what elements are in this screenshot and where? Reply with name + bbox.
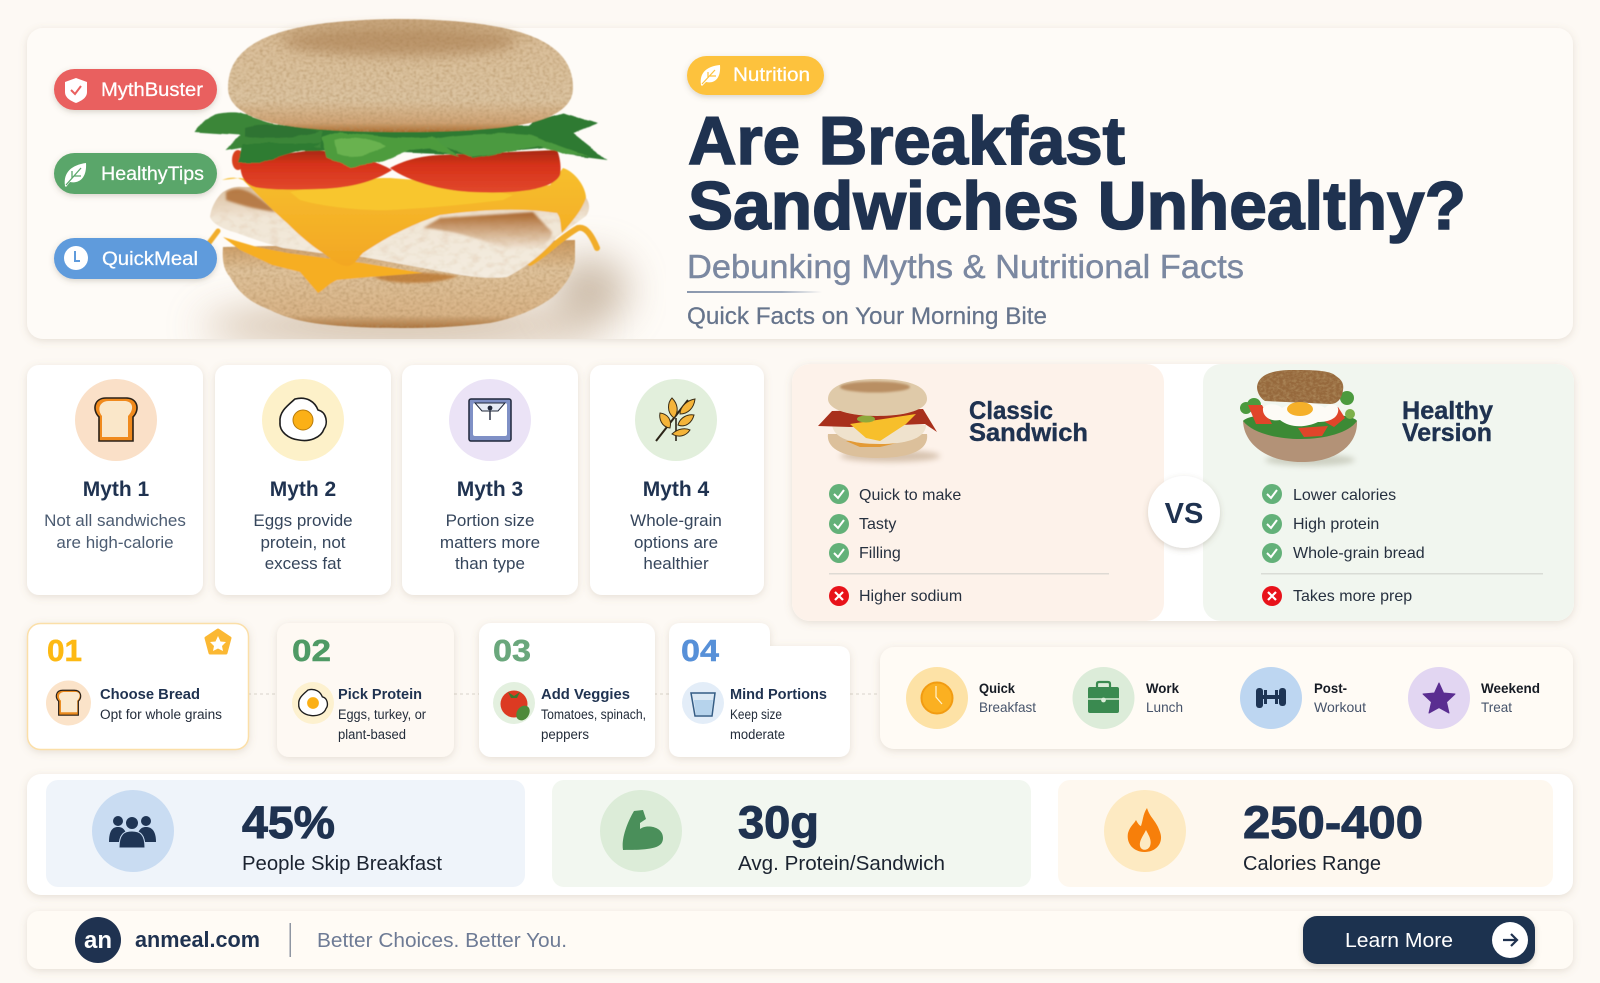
step 04: 04 — [681, 633, 720, 668]
stat: 250-400: Calories Range — [1243, 852, 1381, 875]
card: Myth 2: Myth 2 — [270, 478, 336, 501]
logo — [75, 917, 260, 963]
card: Myth 4: options are — [634, 533, 718, 552]
panel: comparison — [792, 364, 1574, 621]
card: Myth 2 — [215, 365, 391, 595]
icon: leaf — [701, 65, 720, 86]
occasion: Work Lunch: Lunch — [1146, 699, 1183, 715]
tag: HealthyTips — [54, 153, 217, 194]
icon: flexed arm — [623, 810, 663, 850]
card: Myth 1: Not all sandwiches — [44, 511, 186, 530]
pros list: Whole-grain bread — [1293, 545, 1425, 562]
step 03 — [479, 623, 655, 757]
card: Myth 1: are high-calorie — [56, 533, 174, 552]
card: Myth 3: matters more — [440, 533, 540, 552]
pros list: High protein — [1293, 516, 1379, 533]
column: Healthy Version: Healthy — [1402, 397, 1493, 425]
column: Healthy Version — [1203, 364, 1574, 621]
logo: anmeal.com — [135, 927, 260, 952]
stat: 45% — [46, 780, 525, 887]
subtitle: Debunking Myths & Nutritional Facts — [687, 248, 1244, 285]
icon: egg — [299, 689, 327, 716]
occasion: Quick Breakfast — [906, 667, 1036, 729]
badge: VS: VS — [1165, 498, 1203, 530]
con item — [1262, 586, 1412, 606]
pros list — [829, 484, 961, 563]
con item: Takes more prep — [1293, 588, 1412, 605]
pros list: Filling — [859, 545, 901, 562]
icon: people — [109, 816, 156, 848]
step 02: Eggs, turkey, or — [338, 707, 427, 722]
card: Myth 3: Myth 3 — [457, 478, 523, 501]
illustration: classic sandwich — [818, 379, 940, 462]
illustration: breakfast sandwich — [195, 19, 628, 346]
button: Learn More — [1303, 916, 1535, 964]
icon: fried egg — [280, 398, 326, 441]
occasion: Post-Workout: Post- — [1314, 680, 1347, 696]
step 02 — [277, 623, 454, 757]
icon: arrow — [1492, 922, 1528, 958]
stat: 30g — [552, 780, 1031, 887]
panel: stats — [27, 774, 1573, 895]
step 02: 02 — [292, 633, 331, 668]
title: Sandwiches Unhealthy? — [688, 168, 1466, 244]
step 03: 03 — [493, 633, 531, 668]
occasion: Work Lunch: Work — [1146, 680, 1179, 696]
step 01: Choose Bread — [100, 687, 200, 703]
illustration: healthy bowl — [1240, 370, 1357, 466]
icon: bread — [56, 690, 81, 715]
pros list: Lower calories — [1293, 487, 1396, 504]
column: Classic Sandwich: Sandwich — [969, 419, 1088, 447]
column: Healthy Version: Version — [1402, 419, 1492, 447]
step 04: Keep size — [730, 707, 782, 722]
column: Classic Sandwich — [792, 364, 1164, 621]
icon: star badge — [206, 630, 230, 653]
tag: HealthyTips: HealthyTips — [101, 163, 204, 185]
tagline: Better Choices. Better You. — [317, 929, 567, 952]
icon: tomato — [500, 690, 533, 723]
icon: scale — [469, 399, 511, 441]
tag: MythBuster: MythBuster — [101, 79, 204, 101]
card: Myth 3: than type — [455, 554, 525, 573]
stat: 30g: Avg. Protein/Sandwich — [738, 852, 945, 875]
icon: wheat — [656, 398, 695, 441]
stat: 30g: 30g — [738, 797, 819, 848]
con item — [829, 586, 962, 606]
icon: clock — [64, 246, 88, 270]
panel: myth cards — [27, 365, 764, 595]
occasion: Weekend Treat: Treat — [1481, 699, 1512, 715]
step 02: Pick Protein — [338, 687, 422, 703]
badge: Nutrition — [687, 56, 824, 95]
occasion: Weekend Treat: Weekend — [1481, 680, 1540, 696]
step 04: Mind Portions — [730, 687, 827, 703]
step 03: Add Veggies — [541, 687, 630, 703]
stat: 250-400: 250-400 — [1243, 797, 1423, 848]
tagline: Quick Facts on Your Morning Bite — [687, 303, 1047, 330]
panel: footer — [27, 911, 1573, 969]
occasion: Weekend Treat — [1408, 667, 1540, 729]
card: Myth 1: Myth 1 — [83, 478, 150, 501]
icon: leaf — [65, 163, 86, 187]
occasion: Quick Breakfast: Breakfast — [979, 699, 1036, 715]
icon: measuring cup — [691, 693, 715, 716]
card: Myth 4 — [590, 365, 764, 595]
title — [688, 103, 1466, 244]
card: Myth 4: healthier — [643, 554, 709, 573]
stat: 45%: People Skip Breakfast — [242, 852, 442, 875]
tag: QuickMeal: QuickMeal — [102, 248, 198, 270]
badge: Nutrition: Nutrition — [733, 65, 810, 86]
icon: shield — [65, 78, 87, 103]
step 01: 01 — [47, 633, 82, 668]
step 04 — [669, 623, 850, 757]
icon: bread — [95, 398, 137, 441]
panel: steps — [28, 623, 850, 757]
occasion: Post-Workout: Workout — [1314, 699, 1366, 715]
badge: VS — [1148, 476, 1220, 548]
panel: hero — [27, 19, 1573, 346]
stat: 45%: 45% — [242, 797, 335, 848]
card: Myth 2: excess fat — [265, 554, 342, 573]
occasion: Post-Workout — [1240, 667, 1366, 729]
column: Classic Sandwich: Classic — [969, 397, 1053, 425]
step 03: Tomatoes, spinach, — [541, 707, 646, 722]
card: Myth 4: Whole-grain — [630, 511, 722, 530]
step 02: plant-based — [338, 727, 406, 742]
tag: MythBuster — [54, 69, 217, 110]
icon: flame — [1128, 808, 1161, 852]
step 04: moderate — [730, 727, 785, 742]
card: Myth 3 — [402, 365, 578, 595]
step 03: peppers — [541, 727, 589, 742]
panel: occasions — [880, 647, 1573, 749]
title: Are Breakfast — [688, 103, 1125, 179]
pros list: Quick to make — [859, 487, 961, 504]
pros list — [1262, 484, 1425, 563]
occasion: Work Lunch — [1072, 667, 1183, 729]
card: Myth 3: Portion size — [446, 511, 534, 530]
card: Myth 2: protein, not — [260, 533, 346, 552]
step 01: Opt for whole grains — [100, 707, 222, 722]
con item: Higher sodium — [859, 588, 962, 605]
button: Learn More: Learn More — [1345, 930, 1453, 952]
step 01 — [28, 624, 248, 750]
occasion: Quick Breakfast: Quick — [979, 680, 1015, 696]
card: Myth 4: Myth 4 — [643, 478, 710, 501]
pros list: Tasty — [859, 516, 896, 533]
card: Myth 2: Eggs provide — [253, 511, 353, 530]
stat: 250-400 — [1058, 780, 1553, 887]
logo: an — [84, 927, 112, 954]
tag: QuickMeal — [54, 238, 217, 279]
card: Myth 1 — [27, 365, 203, 595]
